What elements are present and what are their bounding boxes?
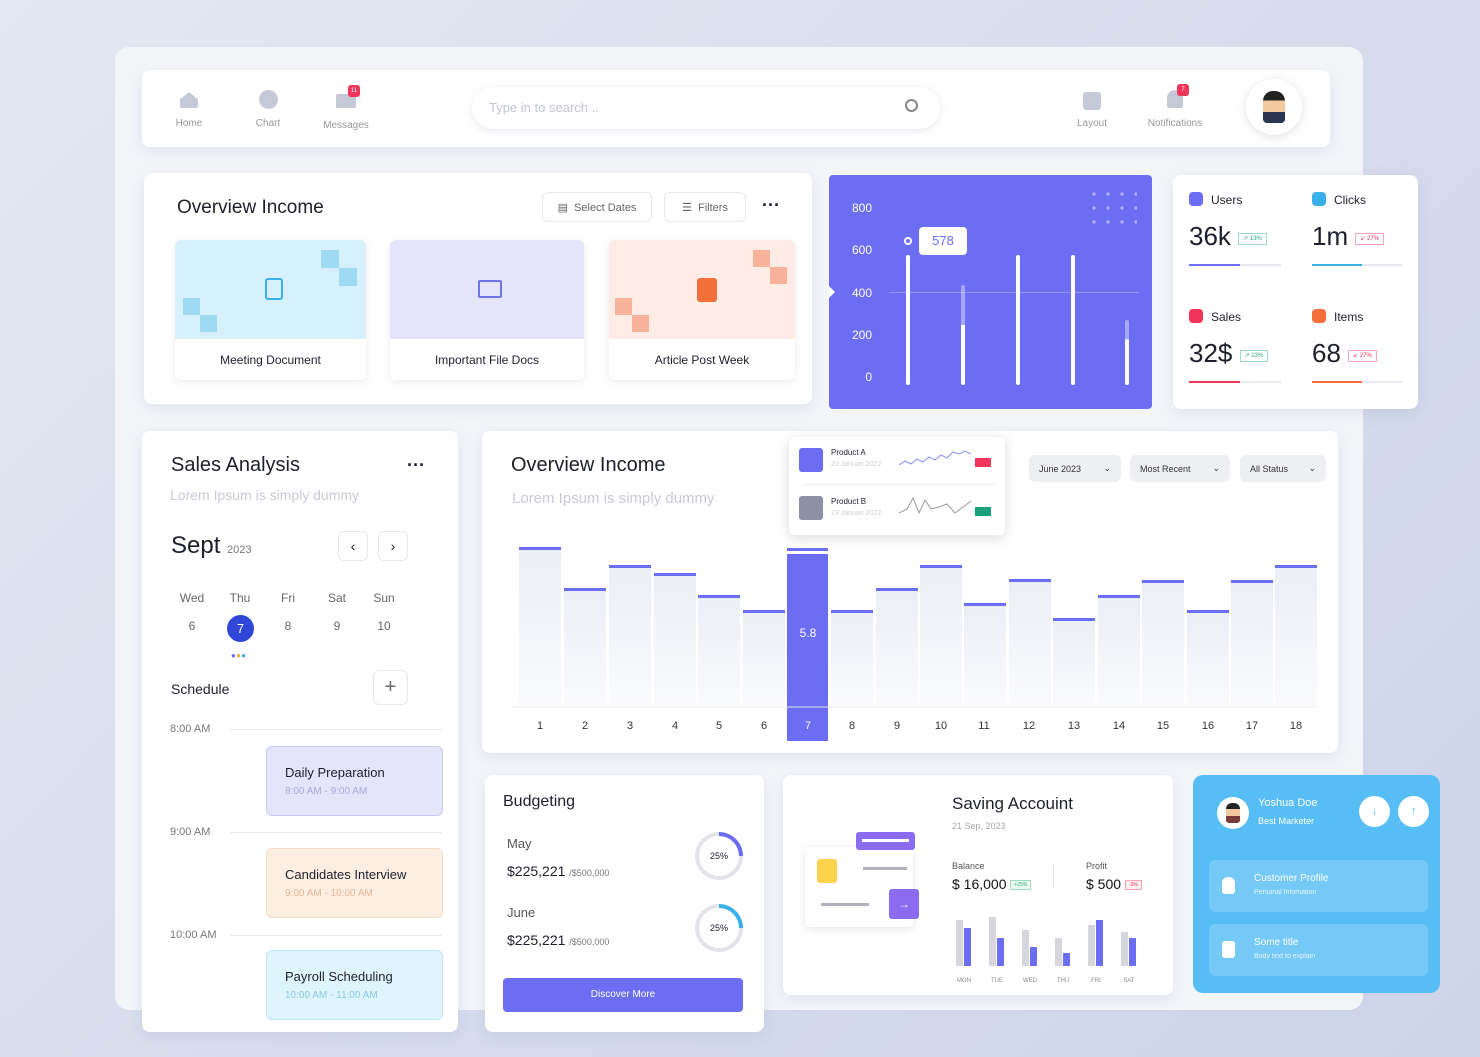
nav arrows: ‹ — [351, 538, 355, 554]
mini bar chart: WED — [1023, 978, 1038, 984]
nav arrows — [338, 531, 368, 561]
day strip: Thu — [230, 591, 250, 605]
panel: saving account: 21 Sep, 2023 — [952, 821, 1006, 831]
heading: Budgeting — [503, 793, 575, 810]
day strip: 10 — [377, 619, 391, 633]
select dates button: ▤ Select Dates — [558, 202, 636, 214]
bar chart: 5 — [716, 720, 722, 732]
y axis labels — [852, 201, 872, 384]
bar chart: 10 — [935, 720, 947, 732]
bar chart: 15 — [1157, 720, 1169, 732]
file card: important — [390, 240, 584, 380]
panel: saving account — [783, 775, 1173, 995]
day strip: Sat — [328, 591, 346, 605]
panel: overview income chart: Lorem Ipsum is simply dummy — [512, 490, 715, 507]
event: interview: Candidates Interview — [285, 867, 406, 882]
stat sales: 32$ ↗ 13% — [1189, 338, 1263, 368]
panel: overview income top — [144, 173, 812, 404]
stat items: 68 ↙ 27% — [1312, 338, 1372, 368]
dropdowns: June 2023 — [1039, 464, 1081, 474]
dropdowns — [1029, 455, 1121, 482]
nav: chart: Chart — [256, 118, 280, 129]
timeline: 8:00 AM — [170, 723, 210, 735]
product popup: Product B — [831, 497, 866, 506]
event: payroll — [266, 950, 443, 1020]
bar chart: 14 — [1113, 720, 1125, 732]
panel: profile card: ↑ — [1411, 805, 1416, 817]
name — [1258, 797, 1318, 826]
y axis labels: 0 — [865, 370, 872, 384]
top nav — [142, 70, 1330, 147]
panel: sales analysis: › — [391, 538, 395, 554]
panel: overview income chart: All Status — [1250, 464, 1288, 474]
profit: $ 500 -3% — [1086, 876, 1138, 892]
nav: notifications: Notifications — [1148, 118, 1202, 129]
select dates button — [542, 192, 652, 222]
stat users — [1189, 192, 1281, 266]
bar chart: 16 — [1202, 720, 1214, 732]
panel: budgeting: 25% — [710, 923, 728, 933]
panel: sales analysis — [142, 431, 458, 1032]
pointer — [829, 286, 835, 298]
panel: overview income chart: Most Recent — [1140, 464, 1191, 474]
stat sales: Sales — [1211, 310, 1241, 324]
nav: layout: Layout — [1077, 118, 1107, 129]
bar chart — [512, 547, 1318, 741]
action icons: ↓ — [1372, 805, 1377, 817]
event: payroll: Payroll Scheduling — [285, 969, 393, 984]
more menu: ··· — [762, 195, 780, 215]
panel: overview income chart: ⌄ — [1212, 463, 1220, 473]
nav: messages: Messages — [323, 120, 369, 131]
nav: layout — [1077, 92, 1107, 129]
product b — [799, 496, 823, 520]
some title item: Some title — [1254, 937, 1298, 948]
some title item: Body text to explain — [1254, 953, 1315, 960]
mini bar chart: MON — [957, 978, 971, 984]
nav: home — [176, 92, 202, 129]
nav: home: Home — [176, 118, 202, 129]
panel: sales analysis: ··· — [407, 455, 425, 475]
bar chart: 1 — [537, 720, 543, 732]
balance: $ 16,000 +25% — [952, 876, 1027, 892]
stat clicks: Clicks — [1334, 193, 1366, 207]
heading: Sales Analysis — [171, 454, 300, 476]
day strip: ● ● ● — [231, 651, 245, 660]
search bar — [472, 87, 940, 129]
schedule heading: Schedule — [171, 681, 229, 697]
discover button: Discover More — [591, 989, 655, 1000]
mini bar chart: THU — [1057, 978, 1069, 984]
day strip: 6 — [189, 619, 195, 633]
bar chart: 6 — [761, 720, 767, 732]
filters button — [664, 192, 746, 222]
panel: profile card — [1193, 775, 1440, 993]
discover button — [503, 978, 743, 1012]
panel: budgeting: $225,221 /$500,000 — [507, 863, 609, 879]
event: daily prep: 8:00 AM - 9:00 AM — [285, 786, 367, 797]
bar chart: 12 — [1023, 720, 1035, 732]
bar chart: 18 — [1290, 720, 1302, 732]
day strip: Sun — [373, 591, 395, 605]
bar chart: 9 — [894, 720, 900, 732]
profit — [1086, 861, 1142, 892]
customer profile item: Personal Infomation — [1254, 889, 1316, 896]
product popup: 23 Januari 2022 — [831, 461, 881, 468]
file card: article — [609, 240, 795, 380]
product popup: 23 Januari 2022 — [831, 510, 881, 517]
file card: meeting — [175, 240, 366, 380]
stat clicks — [1312, 192, 1402, 266]
avatar — [1246, 79, 1302, 135]
main panel — [115, 47, 1363, 1010]
name: Yoshua Doe — [1258, 797, 1318, 809]
action icons — [1359, 796, 1390, 827]
event: interview: 9:00 AM - 10:00 AM — [285, 888, 373, 899]
mini bar chart — [956, 917, 1136, 984]
search bar: Type in to search .. — [489, 100, 599, 115]
day strip — [180, 591, 395, 660]
mini bar chart: TUE — [991, 978, 1003, 984]
bar chart: 2 — [582, 720, 588, 732]
panel: budgeting — [485, 775, 764, 1032]
bar chart: 4 — [672, 720, 678, 732]
stat items: Items — [1334, 310, 1363, 324]
subtitle: Lorem Ipsum is simply dummy — [170, 487, 359, 503]
day strip: 9 — [334, 619, 340, 633]
mini bar chart: FRI — [1091, 978, 1101, 984]
bar chart: 13 — [1068, 720, 1080, 732]
heading: Overview Income — [177, 197, 324, 218]
filters button: ☰ Filters — [682, 202, 728, 214]
may row: May — [507, 836, 532, 851]
avatar — [1217, 797, 1249, 829]
file card: article: Article Post Week — [655, 353, 749, 367]
y axis labels: 600 — [852, 243, 872, 257]
event: daily prep: Daily Preparation — [285, 765, 385, 780]
day strip: Fri — [281, 591, 295, 605]
mini bar chart: SAT — [1123, 978, 1135, 984]
day strip: 8 — [285, 619, 291, 633]
stat users: 36k ↗ 13% — [1189, 221, 1262, 251]
bar chart: 5.8 — [800, 626, 817, 640]
name: Best Marketer — [1258, 816, 1314, 826]
bars — [906, 255, 910, 385]
product popup — [789, 437, 1005, 535]
stat clicks: 1m ↙ 27% — [1312, 221, 1379, 251]
bar chart: 8 — [849, 720, 855, 732]
profit: Profit — [1086, 861, 1107, 871]
y axis labels: 400 — [852, 286, 872, 300]
dot grid — [1087, 187, 1137, 233]
day strip: Wed — [180, 591, 204, 605]
balance — [952, 861, 1031, 892]
heading: Saving Accouint — [952, 794, 1073, 813]
panel: purple bar chart — [829, 175, 1152, 409]
balance: Balance — [952, 861, 985, 871]
nav: notifications: 7 — [1181, 87, 1185, 93]
bar chart: 11 — [978, 720, 990, 732]
tooltip 578: 578 — [932, 233, 954, 248]
day strip: 7 — [237, 621, 244, 636]
nav: messages — [323, 85, 369, 131]
customer profile item: Customer Profile — [1254, 873, 1328, 884]
panel: sales analysis: 9:00 AM — [170, 826, 210, 838]
month: Sept 2023 — [171, 532, 252, 559]
bar chart: 17 — [1246, 720, 1258, 732]
event: daily prep — [266, 746, 443, 816]
nav: notifications — [1148, 84, 1202, 129]
event: payroll: 10:00 AM - 11:00 AM — [285, 990, 378, 1001]
heading: Overview Income — [511, 454, 666, 476]
product a — [799, 448, 823, 472]
panel: budgeting: 25% — [710, 851, 728, 861]
y axis labels: 800 — [852, 201, 872, 215]
file card: meeting: Meeting Document — [220, 353, 321, 367]
event: interview — [266, 848, 443, 918]
product popup: Product A — [831, 448, 866, 457]
nav: chart — [256, 90, 280, 129]
tooltip 578 — [919, 227, 967, 255]
panel: overview income chart — [482, 431, 1338, 753]
panel: sales analysis: + — [385, 676, 396, 698]
panel: budgeting: $225,221 /$500,000 — [507, 932, 609, 948]
bar chart: 7 — [805, 720, 811, 732]
nav: messages: 11 — [351, 88, 357, 94]
some title item — [1209, 924, 1428, 976]
illustration — [805, 847, 913, 927]
panel: sales analysis: 10:00 AM — [170, 929, 216, 941]
bar chart: 3 — [627, 720, 633, 732]
june row: June — [507, 905, 535, 920]
illustration: → — [898, 897, 910, 911]
y axis labels: 200 — [852, 328, 872, 342]
stat sales — [1189, 309, 1281, 383]
panel: overview income chart: ⌄ — [1308, 463, 1316, 473]
panel: stats — [1173, 175, 1418, 409]
file card: important: Important File Docs — [435, 353, 539, 367]
stat items — [1312, 309, 1402, 383]
stat users: Users — [1211, 193, 1242, 207]
customer profile item — [1209, 860, 1428, 912]
dropdowns: ⌄ — [1103, 463, 1111, 473]
